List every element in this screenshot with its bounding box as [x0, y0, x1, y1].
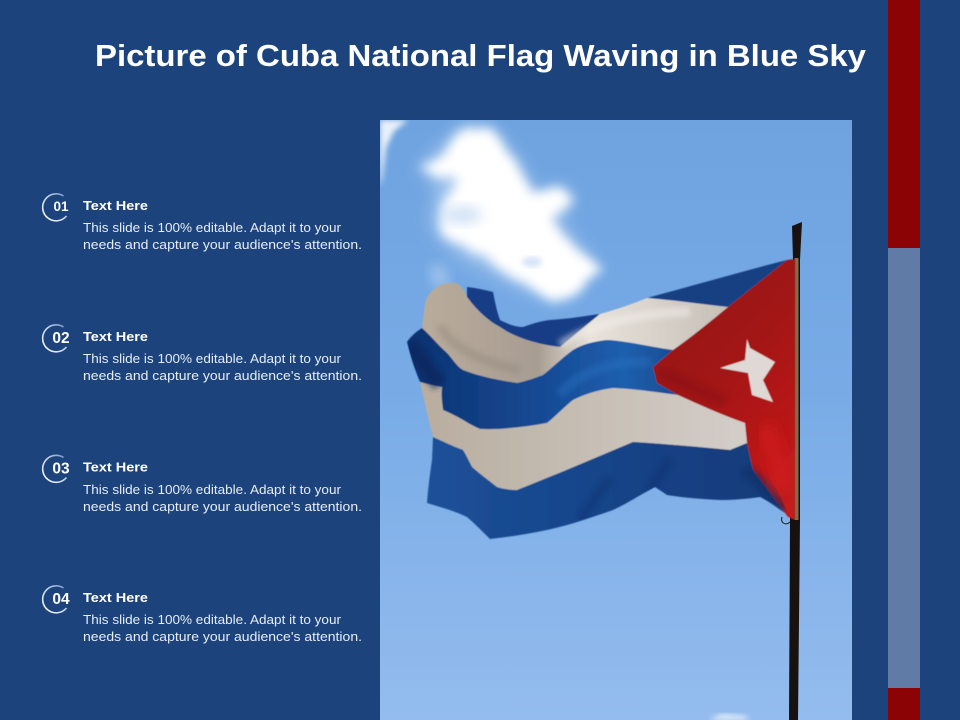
item text 04: needs and capture your audience's attention. — [83, 629, 362, 644]
item text 03: needs and capture your audience's attention. — [83, 499, 362, 514]
item text 02 — [83, 329, 362, 383]
red highlights — [660, 372, 785, 490]
flag tail detail — [782, 517, 790, 524]
flag pole — [789, 222, 802, 720]
item text 01 — [83, 198, 362, 252]
list item 04 — [43, 586, 362, 644]
top blue stripe — [647, 260, 787, 307]
item text 02: This slide is 100% editable. Adapt it to your — [83, 351, 342, 366]
number badge 03: 03 — [52, 460, 70, 478]
item text 02: needs and capture your audience's attention. — [83, 368, 362, 383]
item text 04: Text Here — [83, 590, 148, 605]
item text 04 — [83, 590, 362, 644]
item text 01: Text Here — [83, 198, 148, 213]
number badge 04: 04 — [52, 591, 70, 608]
number badge 03 — [43, 455, 70, 482]
item text 03 — [83, 460, 362, 514]
list item 02 — [43, 325, 362, 383]
item text 02: Text Here — [83, 329, 148, 344]
number badge 02: 02 — [52, 330, 70, 347]
upper blue fold — [467, 287, 600, 347]
middle blue stripe — [407, 328, 678, 429]
flag shading — [410, 312, 785, 520]
clouds — [380, 120, 750, 720]
item text 01: needs and capture your audience's attention. — [83, 237, 362, 252]
flag — [407, 259, 795, 539]
white star — [720, 339, 775, 402]
number badge 02 — [43, 325, 70, 352]
item text 03: This slide is 100% editable. Adapt it to your — [83, 482, 342, 497]
lower white stripe — [420, 382, 747, 490]
title: Picture of Cuba National Flag Waving in Blue Sky — [95, 38, 867, 73]
list item 03 — [43, 455, 362, 514]
item text 03: Text Here — [83, 460, 148, 474]
photo: Cuban flag waving in blue sky — [380, 120, 852, 720]
right decorative bar — [888, 0, 920, 720]
number badge 04 — [43, 586, 70, 613]
item text 04: This slide is 100% editable. Adapt it to your — [83, 612, 342, 627]
number badge 01: 01 — [53, 199, 69, 214]
number badge 01 — [43, 194, 69, 221]
bottom blue stripe — [427, 437, 790, 539]
item text 01: This slide is 100% editable. Adapt it to your — [83, 220, 342, 235]
red triangle — [653, 259, 795, 520]
list item 01 — [43, 194, 362, 252]
top white stripe — [422, 283, 728, 383]
